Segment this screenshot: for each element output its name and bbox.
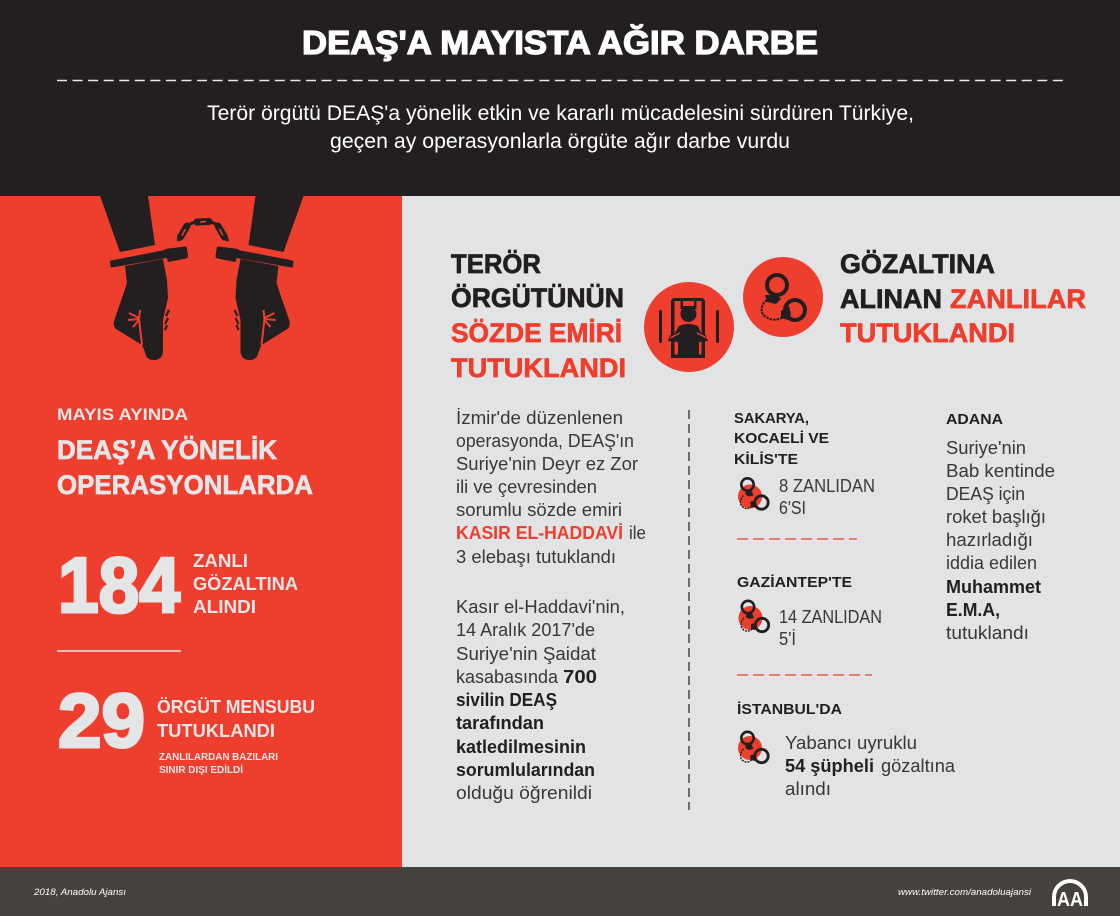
icon: Anadolu Agency logo: AA [1057,889,1083,911]
block: İstanbul [737,701,956,799]
block: İstanbul: alındı [785,779,831,799]
text block: İzmir operation: İzmir'de düzenlenen [456,408,623,428]
stat: 29 members arrested: SINIR DIŞI EDİLDİ [159,763,243,776]
icon: small handcuffs [738,732,768,763]
heading: suspects arrested: TUTUKLANDI [840,318,1015,348]
text: May operations heading [57,405,313,500]
block: Sakarya, Kocaeli, Kilis [734,410,875,518]
text block: İzmir operation: Suriye'nin Deyr ez Zor [456,454,638,474]
heading: leader arrested: TERÖR [451,249,541,279]
heading: leader arrested [451,249,626,383]
stat: 29 members arrested: ZANLILARDAN BAZILARI [159,752,278,763]
block: Adana: Bab kentinde [946,461,1055,481]
text block: İzmir operation: 3 elebaşı tutuklandı [456,547,616,567]
text block: Kasır el-Haddavi background: Suriye'nin Şaidat [456,644,596,664]
header band [0,0,1120,196]
stat: 29 members arrested: ÖRGÜT MENSUBU [157,697,315,717]
text block: İzmir operation [456,408,646,567]
heading: suspects arrested: ALINAN [840,284,942,314]
footer credit: 2018, Anadolu Ajansı [33,887,126,898]
heading: leader arrested: SÖZDE EMİRİ [451,318,622,348]
stat: 184 suspects detained: ALINDI [193,597,256,617]
footer url: www.twitter.com/anadoluajansi [898,887,1032,898]
text block: Kasır el-Haddavi background: katledilmesinin [456,737,586,757]
title: DEAŞ'A MAYISTA AĞIR DARBE [302,24,818,61]
text: May operations heading: MAYIS AYINDA [57,405,188,424]
heading: leader arrested: ÖRGÜTÜNÜN [451,283,624,313]
block: Sakarya, Kocaeli, Kilis: 6'SI [779,498,806,518]
block: Gaziantep: GAZİANTEP'TE [737,574,852,591]
text: May operations heading: OPERASYONLARDA [57,470,313,500]
block: Adana: DEAŞ için [946,484,1025,504]
block: Adana: tutuklandı [946,623,1029,643]
text block: Kasır el-Haddavi background [456,597,625,803]
block: Adana [946,411,1055,643]
text block: İzmir operation: sorumlu sözde emiri [456,500,622,520]
subtitle: geçen ay operasyonlarla örgüte ağır darbe vurdu [330,130,790,153]
icon: handcuffs in circle [743,257,823,337]
icon: small handcuffs [738,601,769,632]
block: Adana: Muhammet [946,577,1041,597]
text: May operations heading: DEAŞ’A YÖNELİK [57,435,277,465]
block: İstanbul: Yabancı uyruklu [785,733,917,753]
stat: 184 suspects detained: GÖZALTINA [193,574,298,594]
text block: Kasır el-Haddavi background: Kasır el-Haddavi'nin, [456,597,625,617]
block: Adana: hazırladığı [946,530,1033,550]
icon: prisoner behind bars [644,282,734,372]
text block: Kasır el-Haddavi background: 700 [563,667,597,687]
block: İstanbul: İSTANBUL'DA [737,701,842,718]
text block: Kasır el-Haddavi background: tarafından [456,713,544,733]
text block: Kasır el-Haddavi background: 14 Aralık 2017'de [456,620,595,640]
block: Adana: ADANA [946,411,1003,428]
icon: small handcuffs [738,478,768,509]
text block: İzmir operation: ili ve çevresinden [456,477,597,497]
stat: 184 suspects detained: 184 [58,541,180,629]
icon: Anadolu Agency logo [1052,879,1088,911]
stat: 184 suspects detained [58,541,298,629]
text block: Kasır el-Haddavi background: sivilin DEAŞ [456,690,557,710]
icon: handcuffed hands with broken chain [100,196,304,360]
heading: suspects arrested: ZANLILAR [950,284,1086,314]
footer band [0,867,1120,916]
subtitle [207,102,914,153]
block: Adana: iddia edilen [946,553,1037,573]
block: Gaziantep: 14 ZANLIDAN [779,607,882,627]
stat: 29 members arrested [58,679,315,776]
stat: 29 members arrested: 29 [58,679,145,764]
panel: left red statistics [0,196,402,867]
text block: İzmir operation: operasyonda, DEAŞ'ın [456,431,634,451]
block: Sakarya, Kocaeli, Kilis: 8 ZANLIDAN [779,476,875,496]
text block: İzmir operation: ile [629,523,646,543]
block: İstanbul: 54 şüpheli [785,756,874,776]
block: Gaziantep [737,574,882,649]
heading: suspects arrested: GÖZALTINA [840,249,995,279]
block: Adana: Suriye'nin [946,438,1026,458]
block: Adana: E.M.A, [946,600,1000,620]
text block: Kasır el-Haddavi background: sorumlularından [456,760,595,780]
block: Adana: roket başlığı [946,507,1046,527]
block: Gaziantep: 5'İ [779,629,796,649]
block: Sakarya, Kocaeli, Kilis: KOCAELİ VE [734,430,829,447]
text block: Kasır el-Haddavi background: olduğu öğrenildi [456,783,592,803]
text block: Kasır el-Haddavi background: kasabasında [456,667,559,687]
subtitle: Terör örgütü DEAŞ'a yönelik etkin ve kararlı mücadelesini sürdüren Türkiye, [207,102,914,125]
block: Sakarya, Kocaeli, Kilis: SAKARYA, [734,410,809,427]
heading: suspects arrested [840,249,1086,348]
block: İstanbul: gözaltına [881,756,956,776]
block: Sakarya, Kocaeli, Kilis: KİLİS'TE [734,451,798,468]
heading: leader arrested: TUTUKLANDI [451,353,626,383]
text block: İzmir operation: KASIR EL-HADDAVİ [456,523,623,543]
stat: 29 members arrested: TUTUKLANDI [157,721,275,741]
stat: 184 suspects detained: ZANLI [193,551,248,571]
